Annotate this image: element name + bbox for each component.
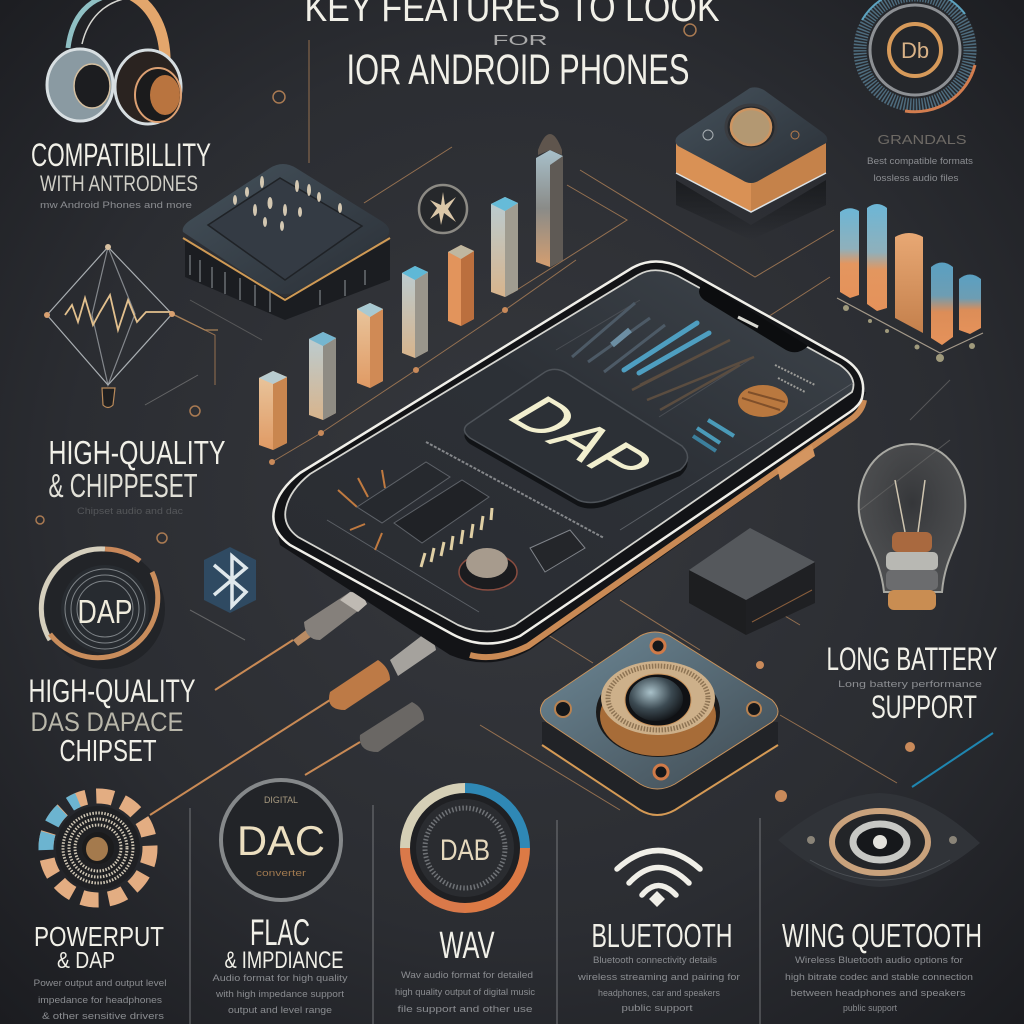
phone screen: DAP button: DAP	[492, 386, 671, 492]
text block: upper right caption: Best compatible formats	[867, 156, 973, 167]
icon: DAC badge: DAC	[237, 817, 325, 864]
text block: bluetooth: Bluetooth connectivity details	[593, 955, 717, 966]
icon: audio cables	[150, 592, 436, 815]
text block: bluetooth	[577, 917, 740, 1014]
phone screen	[285, 270, 854, 632]
text block: WAV	[395, 925, 535, 1015]
text block: upper right caption	[867, 132, 973, 184]
text block: FLAC: FLAC	[250, 912, 310, 953]
text block: high-quality chipset	[48, 434, 226, 517]
text block: power output: & other sensitive drivers	[42, 1011, 164, 1022]
text block: WAV: file support and other use	[398, 1004, 532, 1015]
bar chart: right side bars	[837, 204, 983, 362]
text block: FLAC: output and level range	[228, 1005, 332, 1016]
icon: top right DAP badge	[853, 0, 977, 112]
text block: FLAC: with high impedance support	[215, 989, 344, 1000]
title: FOR	[492, 32, 548, 49]
icon: light bulb	[859, 444, 965, 610]
icon: chipset block	[183, 164, 390, 320]
text block: wing quetooth: between headphones and speakers	[790, 988, 966, 999]
icon: orange cube	[675, 87, 827, 240]
icon: gear	[46, 796, 150, 900]
text block: long battery	[826, 641, 998, 725]
text block: WAV: Wav audio format for detailed	[401, 970, 533, 981]
text block: wing quetooth: public support	[843, 1003, 897, 1014]
text block: FLAC	[212, 912, 348, 1016]
text block: high-quality DAC: CHIPSET	[60, 733, 157, 768]
text block: power output: POWERPUT	[34, 921, 164, 952]
phone screen: chip panel	[327, 383, 853, 612]
icon: speaker module	[540, 632, 778, 815]
text block: compatibility: COMPATIBILLITY	[31, 137, 211, 173]
phone side button	[777, 445, 815, 480]
text block: upper right caption: GRANDALS	[878, 132, 967, 147]
circuit connector lines	[145, 40, 950, 810]
title	[304, 0, 720, 94]
text block: power output: impedance for headphones	[38, 995, 162, 1006]
text block: high-quality chipset: & CHIPPESET	[48, 467, 198, 504]
icon: top right DAP badge: Db	[901, 38, 929, 63]
text block: power output	[34, 921, 166, 1022]
text block: compatibility: WITH ANTRODNES	[40, 171, 198, 196]
icon: DAB badge: DAB	[440, 834, 490, 867]
text block: WAV: high quality output of digital music	[395, 987, 535, 998]
phone screen: DAP button	[464, 369, 688, 508]
icon: star badge	[419, 185, 467, 233]
text block: long battery: SUPPORT	[871, 689, 977, 725]
icon: DAP dial: DAP	[78, 593, 132, 630]
icon: DAC badge	[221, 780, 341, 900]
text block: high-quality chipset: Chipset audio and dac	[77, 506, 183, 517]
icon: DAC badge: converter	[256, 868, 306, 878]
text block: WAV: WAV	[440, 925, 495, 967]
text block: power output: & DAP	[57, 947, 115, 973]
bar chart: ascending isometric bars	[259, 134, 563, 450]
text block: wing quetooth: Wireless Bluetooth audio options for	[795, 955, 963, 966]
text block: wing quetooth: high bitrate codec and stable connection	[785, 972, 973, 983]
icon: DAC badge: DIGITAL	[264, 795, 298, 805]
icon: DAP dial	[41, 549, 165, 669]
text block: high-quality DAC	[28, 673, 196, 768]
text block: high-quality chipset: HIGH-QUALITY	[48, 434, 226, 471]
text block: high-quality DAC: HIGH-QUALITY	[28, 673, 196, 709]
text block: power output: Power output and output level	[34, 978, 166, 989]
icon: eye target	[778, 793, 980, 887]
text block: long battery: Long battery performance	[838, 679, 982, 690]
text block: high-quality DAC: DAS DAPACE	[30, 707, 184, 737]
text block: bluetooth: BLUETOOTH	[592, 917, 732, 954]
icon: wifi	[617, 850, 700, 907]
text block: compatibility	[31, 137, 211, 211]
text block: bluetooth: public support	[622, 1003, 693, 1014]
text block: FLAC: & IMPDIANCE	[224, 947, 344, 974]
text block: FLAC: Audio format for high quality	[212, 973, 348, 984]
phone	[273, 262, 866, 662]
icon: dark box	[689, 528, 815, 635]
text block: wing quetooth	[782, 917, 982, 1014]
icon: headphones	[47, 0, 181, 124]
phone screen: top waveform panel	[556, 300, 815, 451]
icon: waveform diamond	[44, 244, 218, 408]
phone notch	[699, 282, 808, 352]
text block: compatibility: mw Android Phones and more	[40, 200, 192, 211]
text block: upper right caption: lossless audio files	[874, 173, 959, 184]
text block: bluetooth: headphones, car and speakers	[598, 988, 720, 999]
icon: DAB badge	[402, 785, 528, 911]
icon: bluetooth	[204, 547, 256, 613]
title: IOR ANDROID PHONES	[346, 46, 690, 94]
text block: bluetooth: wireless streaming and pairing for	[577, 972, 740, 983]
